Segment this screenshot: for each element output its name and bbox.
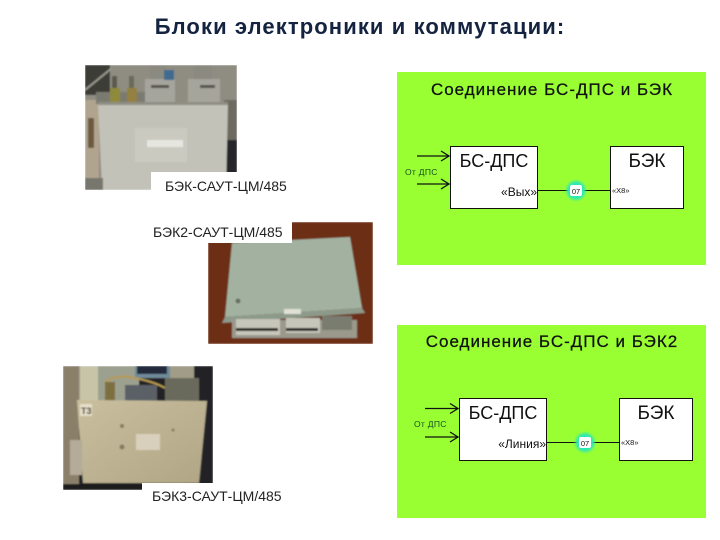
- input label: От ДПС: [405, 167, 438, 177]
- label: БЭК-САУТ-ЦМ/485: БЭК-САУТ-ЦМ/485: [165, 178, 287, 194]
- block: БЭК: БЭК: [638, 403, 674, 424]
- block: БС-ДПС: «Линия»: [498, 437, 546, 451]
- connector badge 07: [576, 433, 594, 452]
- block: БЭК: [610, 146, 684, 208]
- label: БЭК3-САУТ-ЦМ/485: БЭК3-САУТ-ЦМ/485: [152, 488, 282, 504]
- panel heading: Соединение БС-ДПС и БЭК: [431, 80, 673, 99]
- block: БС-ДПС: БС-ДПС: [469, 403, 537, 423]
- block: БС-ДПС: БС-ДПС: [460, 151, 528, 171]
- block: БС-ДПС: [450, 146, 538, 208]
- connector badge 07: 07: [572, 187, 580, 196]
- label: БЭК2-САУТ-ЦМ/485: [150, 222, 292, 243]
- panel: соединение БС-ДПС и БЭК: [397, 72, 706, 265]
- block: БЭК: [620, 398, 692, 460]
- block: БЭК: «Х8»: [621, 438, 639, 447]
- photo: БЭК-САУТ-ЦМ/485: [85, 65, 237, 190]
- block: БЭК: БЭК: [629, 151, 665, 172]
- connector badge 07: 07: [581, 439, 589, 448]
- panel: соединение БС-ДПС и БЭК2: [397, 325, 706, 518]
- connector badge 07: [566, 181, 586, 200]
- connector line: [538, 190, 610, 192]
- block: БС-ДПС: [460, 398, 546, 460]
- label: БЭК3-САУТ-ЦМ/485: [142, 483, 287, 505]
- input arrows: [425, 404, 458, 442]
- block: БЭК: «Х8»: [612, 186, 630, 195]
- photo: БЭК3-САУТ-ЦМ/485: [63, 366, 213, 490]
- label: БЭК-САУТ-ЦМ/485: [151, 172, 291, 194]
- title: Блоки электроники и коммутации:: [155, 14, 565, 39]
- block: БС-ДПС: «Вых»: [501, 185, 537, 199]
- label: БЭК2-САУТ-ЦМ/485: БЭК2-САУТ-ЦМ/485: [153, 224, 283, 240]
- connector line: [547, 442, 619, 444]
- input arrows: [417, 151, 449, 189]
- panel heading: Соединение БС-ДПС и БЭК2: [426, 332, 678, 351]
- photo: БЭК2-САУТ-ЦМ/485: [208, 222, 373, 344]
- photo: БЭК3-САУТ-ЦМ/485: Т3: [81, 406, 92, 416]
- input label: От ДПС: [414, 419, 447, 429]
